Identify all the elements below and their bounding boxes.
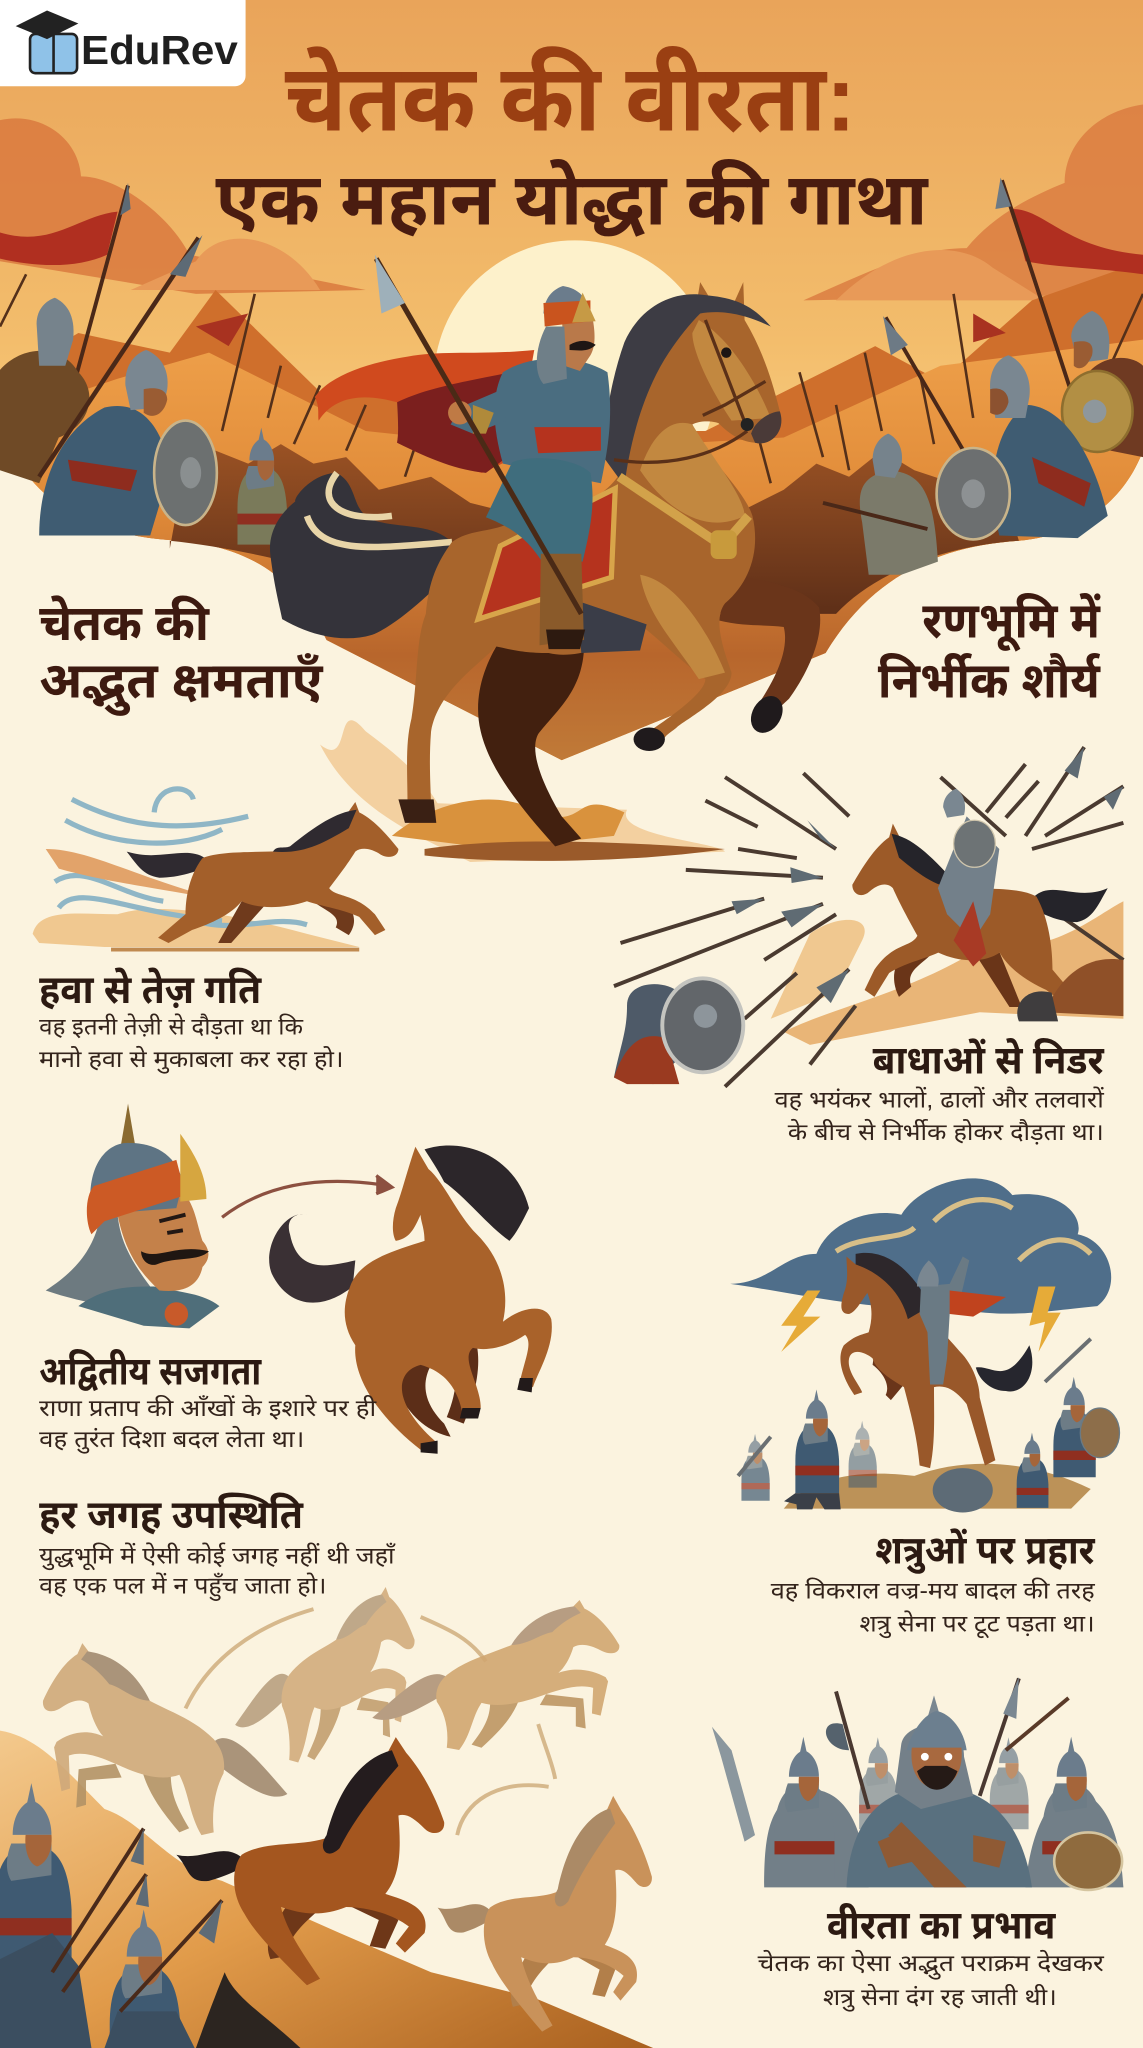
text: alertness: राणा प्रताप की आँखों के इशारे पर ही [39, 1394, 377, 1421]
text: speed: हवा से तेज़ गति [39, 968, 262, 1012]
text: fearless: बाधाओं से निडर [873, 1038, 1104, 1083]
sun [434, 240, 716, 522]
text: everywhere [39, 1493, 397, 1601]
small right soldier [823, 434, 938, 575]
ghost horses [43, 1587, 619, 1835]
hero titles [216, 46, 929, 241]
soldiers at bottom left [0, 1783, 72, 1967]
right flag [1012, 209, 1143, 274]
main horse Chetak [270, 255, 820, 846]
text: everywhere: वह एक पल में न पहुँच जाता हो। [39, 1571, 327, 1601]
right section heading [878, 592, 1101, 708]
illustration: storm attack [730, 1178, 1119, 1512]
text: everywhere: युद्धभूमि में ऐसी कोई जगह नहीं थी जहाँ [39, 1541, 397, 1570]
text: alertness: अद्वितीय सजगता [39, 1349, 263, 1393]
text: everywhere: हर जगह उपस्थिति [39, 1493, 304, 1537]
dusty hillside [0, 1731, 653, 2048]
stirrup [546, 630, 585, 649]
tail [270, 473, 457, 638]
text: attack [771, 1527, 1095, 1638]
bridle [614, 320, 765, 462]
text: attack: वह विकराल वज्र-मय बादल की तरह [771, 1577, 1095, 1604]
soldiers [784, 1390, 841, 1509]
rider head [562, 313, 595, 371]
storm cloud [730, 1178, 1111, 1314]
saddle cloth [478, 488, 615, 619]
text: impact: शत्रु सेना दंग रह जाती थी। [823, 1983, 1057, 2012]
text: fearless: वह भयंकर भालों, ढालों और तलवारों [775, 1086, 1105, 1113]
text: attack: शत्रुओं पर प्रहार [875, 1527, 1095, 1574]
body and near legs [407, 282, 781, 810]
EduRev logo [0, 0, 246, 86]
illustration: horse faster than wind [33, 789, 398, 950]
breast strap [619, 477, 749, 546]
right soldiers with shields [883, 178, 1143, 539]
far hind leg [478, 640, 584, 846]
text: speed: वह इतनी तेज़ी से दौड़ता था कि [39, 1012, 304, 1039]
girth [577, 601, 647, 653]
left section heading [39, 595, 324, 718]
illustration: stunned enemy soldiers [712, 1677, 1123, 1890]
near front hoof [634, 728, 665, 751]
hero panel: battle scene [0, 0, 1143, 760]
text: fearless: के बीच से निर्भीक होकर दौड़ता था। [788, 1118, 1104, 1145]
right section heading: रणभूमि में [922, 592, 1101, 652]
illustration: Rana Pratap portrait [46, 1104, 219, 1328]
rider [495, 359, 610, 483]
distant army [170, 444, 1019, 614]
text: alertness [39, 1349, 377, 1454]
text: impact: चेतक का ऐसा अद्भुत पराक्रम देखकर [758, 1949, 1104, 1980]
left section heading: अद्भुत क्षमताएँ [39, 652, 324, 718]
illustration: everywhere horses [0, 1587, 653, 2048]
text: speed [39, 968, 344, 1074]
bold horse [176, 1737, 444, 1985]
EduRev logo: EduRev [81, 27, 238, 73]
cape [315, 350, 534, 473]
left section heading: चेतक की [39, 595, 210, 651]
text: speed: मानो हवा से मुकाबला कर रहा हो। [39, 1045, 344, 1074]
dust under main horse [320, 720, 725, 862]
text: attack: शत्रु सेना पर टूट पड़ता था। [860, 1609, 1095, 1638]
rider [920, 1256, 969, 1384]
right section heading: निर्भीक शौर्य [878, 652, 1101, 708]
motion arcs [185, 1609, 555, 1835]
lightning [781, 1287, 1061, 1352]
illustration: fearless through obstacles [614, 747, 1123, 1087]
left soldier with shield [0, 183, 217, 536]
text: impact: वीरता का प्रभाव [827, 1903, 1057, 1947]
small left soldier [237, 428, 287, 545]
title line 1: चेतक की वीरता: [285, 46, 856, 151]
left flags [0, 212, 118, 265]
text: fearless [775, 1038, 1105, 1145]
text: impact [758, 1903, 1104, 2012]
mane [604, 294, 771, 486]
ground [784, 1464, 1091, 1509]
central soldier [846, 1789, 1032, 1887]
rearing horse [873, 1345, 904, 1400]
clouds [0, 104, 1143, 300]
spear [376, 259, 581, 614]
text: alertness: वह तुरंत दिशा बदल लेता था। [39, 1425, 304, 1454]
mountains [0, 261, 1143, 760]
illustration: alert horse [269, 1145, 552, 1454]
light horse [438, 1796, 652, 2032]
arrow: eye signal to horse [222, 1176, 392, 1217]
hero sky shape [0, 0, 1143, 760]
distant spears [0, 274, 1143, 483]
title line 2: एक महान योद्धा की गाथा [216, 159, 929, 241]
far front leg [718, 575, 820, 716]
